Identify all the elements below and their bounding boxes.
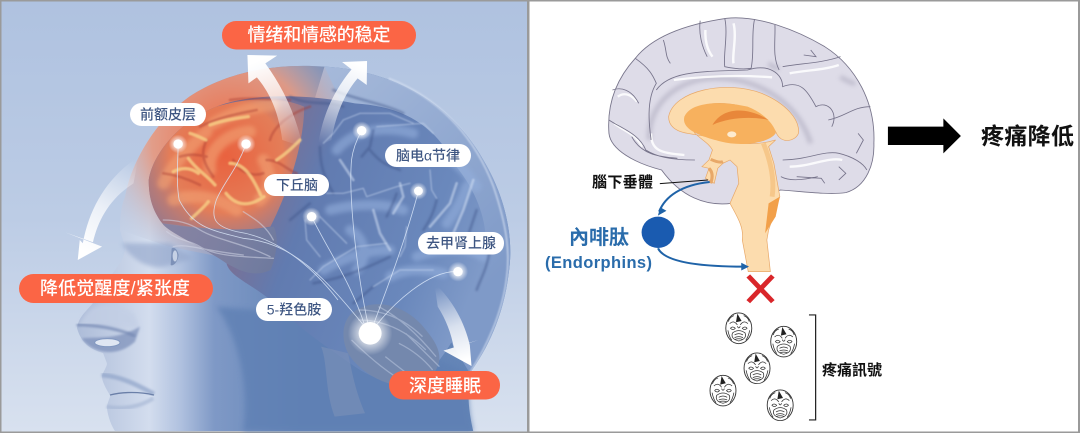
label: hypothalamus: 下丘脑 bbox=[276, 177, 318, 193]
text: pain reduced: 疼痛降低 bbox=[981, 123, 1074, 149]
label: prefrontal cortex bbox=[130, 103, 206, 126]
face details: nose, eye, mouth bbox=[77, 243, 193, 408]
cerebellum bbox=[321, 304, 439, 417]
label: serotonin bbox=[256, 298, 332, 321]
arrows bbox=[65, 55, 478, 366]
leader line bbox=[660, 180, 708, 184]
sagittal brain bbox=[609, 18, 874, 204]
label: hypothalamus bbox=[264, 174, 329, 196]
panel: endorphin pain diagram bbox=[528, 0, 1080, 433]
text: endorphin chinese: 內啡肽 bbox=[569, 226, 629, 249]
red cross bbox=[748, 276, 773, 302]
head silhouette bbox=[77, 66, 510, 431]
neural lines bbox=[177, 131, 458, 333]
label: prefrontal cortex: 前额皮层 bbox=[140, 106, 196, 122]
rear brain gyri detail bbox=[290, 90, 490, 303]
big black arrow bbox=[888, 118, 961, 153]
label: norepinephrine bbox=[418, 232, 504, 254]
corpus callosum and brainstem bbox=[669, 87, 799, 272]
pill: emotional stability bbox=[222, 21, 416, 50]
bracket bbox=[809, 315, 816, 420]
text: pain signals: 疼痛訊號 bbox=[822, 361, 882, 379]
glowing nodes bbox=[169, 121, 468, 355]
text: pituitary gland: 腦下垂體 bbox=[592, 173, 653, 191]
curved arrow to endorphin bbox=[658, 182, 710, 215]
panel: serotonin head illustration bbox=[0, 0, 528, 433]
endorphin circle bbox=[642, 217, 675, 248]
text: endorphins english: (Endorphins) bbox=[545, 254, 652, 272]
label: serotonin: 5-羟色胺 bbox=[267, 302, 321, 318]
pill: deep sleep bbox=[389, 371, 500, 400]
curved arrow to spinal cord bbox=[658, 248, 748, 270]
pill: lower arousal: 降低觉醒度/紧张度 bbox=[40, 278, 190, 298]
label: alpha rhythm: 脑电α节律 bbox=[396, 148, 460, 164]
brain bbox=[149, 96, 486, 417]
pill: lower arousal bbox=[19, 274, 213, 303]
label: norepinephrine: 去甲肾上腺 bbox=[426, 235, 496, 251]
pain signal faces bbox=[710, 313, 797, 421]
frontal lobe gyri detail bbox=[163, 99, 310, 258]
pill: deep sleep: 深度睡眠 bbox=[409, 376, 481, 396]
pill: emotional stability: 情绪和情感的稳定 bbox=[248, 25, 390, 45]
label: alpha rhythm bbox=[385, 144, 471, 167]
